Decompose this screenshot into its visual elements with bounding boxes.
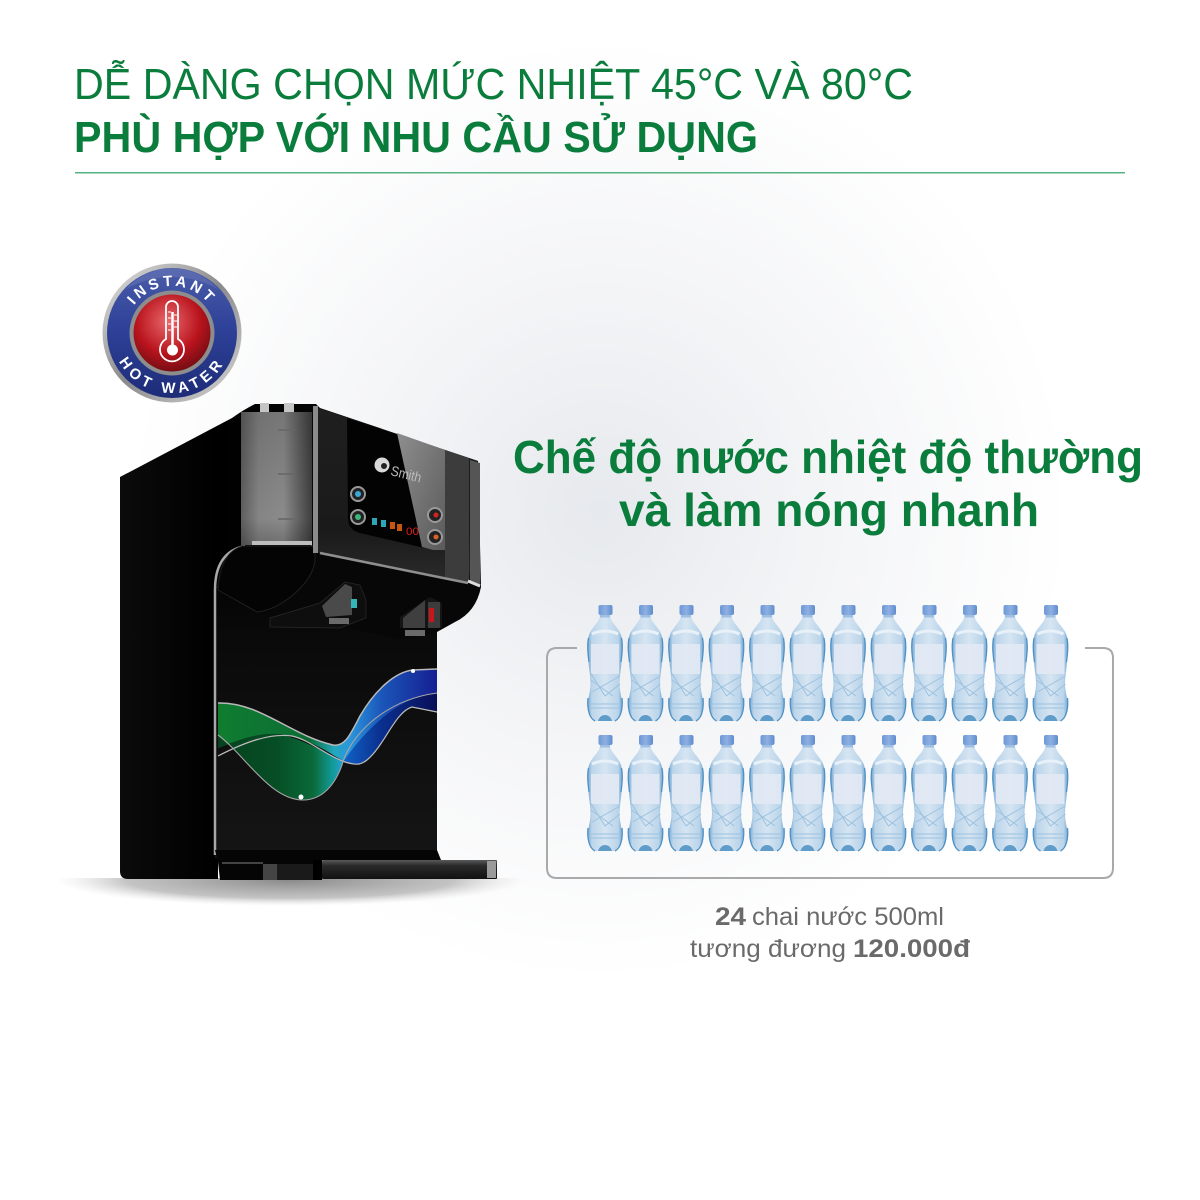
title line 2: PHÙ HỢP VỚI NHU CẦU SỬ DỤNG <box>74 111 758 162</box>
logo <box>374 458 390 472</box>
icon: thermometer <box>160 301 184 361</box>
title line 1: DỄ DÀNG CHỌN MỨC NHIỆT 45°C VÀ 80°C <box>74 59 913 109</box>
bottles grid <box>588 605 1068 851</box>
body side <box>120 404 312 879</box>
cup recess <box>218 546 315 612</box>
base tray <box>215 850 497 880</box>
buttons <box>351 487 365 501</box>
bottle caption: chai nước 500ml <box>752 903 944 931</box>
faucets <box>270 582 442 636</box>
front panel <box>215 546 437 858</box>
wave graphic <box>218 669 437 800</box>
indicators <box>372 518 377 525</box>
control panel: 00 <box>406 526 419 538</box>
control panel <box>347 418 480 587</box>
control panel: Smith <box>389 462 423 485</box>
icon: instant hot water badge: HOT WATER <box>119 356 223 393</box>
icon: instant hot water badge <box>102 264 242 402</box>
heading line 2: và làm nóng nhanh <box>619 484 1039 536</box>
bottle caption: 120.000đ <box>853 935 971 963</box>
heading <box>513 431 1143 536</box>
bottle caption <box>690 903 971 963</box>
water purifier <box>56 403 524 906</box>
floor shadow <box>73 878 506 904</box>
arch edge <box>215 546 245 855</box>
bracket frame <box>547 648 1113 878</box>
bottle caption: 24 <box>715 903 746 931</box>
housing highlight <box>320 553 468 583</box>
steel column <box>241 403 318 553</box>
title <box>74 59 913 162</box>
heading line 1: Chế độ nước nhiệt độ thường <box>513 431 1143 483</box>
bottle caption: tương đương <box>690 935 846 963</box>
upper housing <box>218 404 481 640</box>
icon: instant hot water badge: INSTANT <box>126 276 216 304</box>
